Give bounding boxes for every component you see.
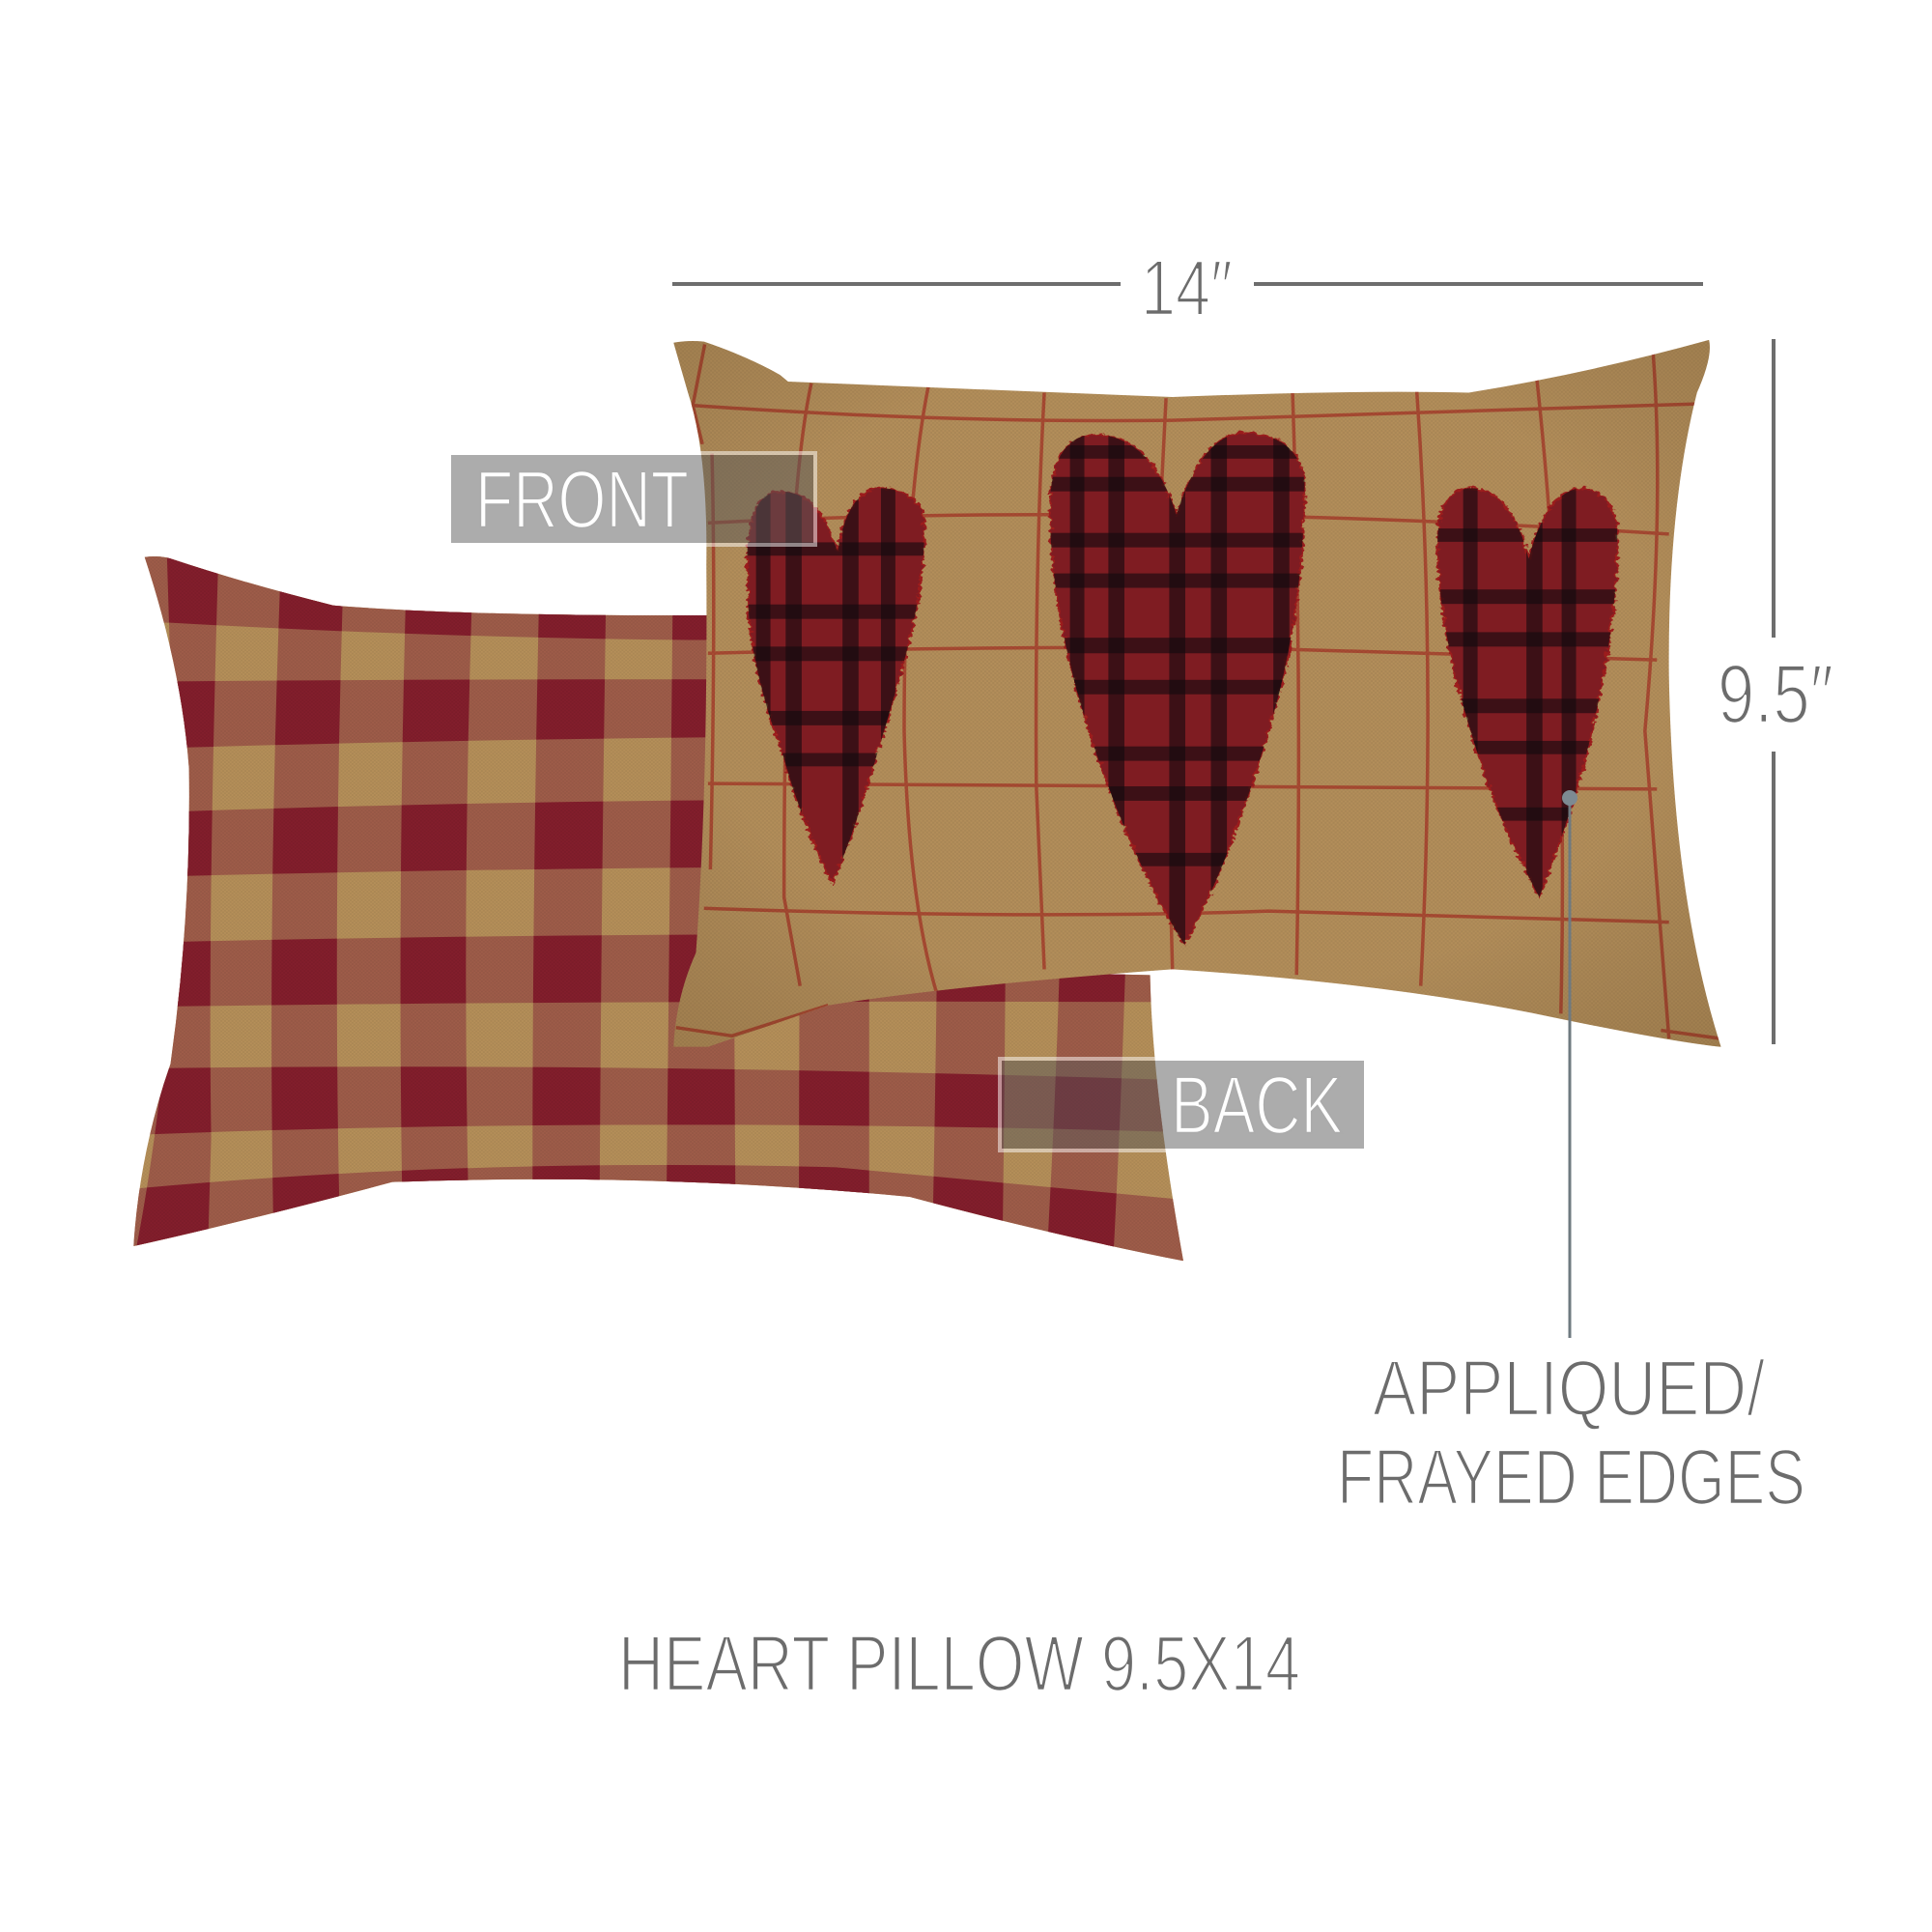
callout leader line and dot xyxy=(1562,790,1577,1338)
title: HEART PILLOW 9.5X14 xyxy=(618,1620,1300,1708)
pillow edge shading xyxy=(674,340,1721,1047)
callout text: appliqued frayed edges xyxy=(1337,1345,1805,1521)
width dimension: 14 inches: 14″ xyxy=(1141,244,1233,332)
BACK label xyxy=(1000,1059,1366,1151)
infographic canvas xyxy=(133,262,1832,1690)
BACK label: BACK xyxy=(1171,1060,1343,1151)
FRONT label: FRONT xyxy=(475,454,689,545)
pillow fabric body xyxy=(673,340,1721,1047)
heart left xyxy=(744,486,927,886)
heart right xyxy=(1435,485,1621,898)
height dimension: 9.5 inches: 9.5″ xyxy=(1718,648,1833,741)
windowpane grid lines xyxy=(676,345,1721,1038)
callout text: appliqued frayed edges: APPLIQUED/ xyxy=(1373,1345,1765,1433)
back pillow: red and tan buffalo check xyxy=(133,556,1183,1262)
heart center xyxy=(1037,420,1317,952)
front pillow: tan windowpane with three plaid hearts xyxy=(673,340,1721,1047)
